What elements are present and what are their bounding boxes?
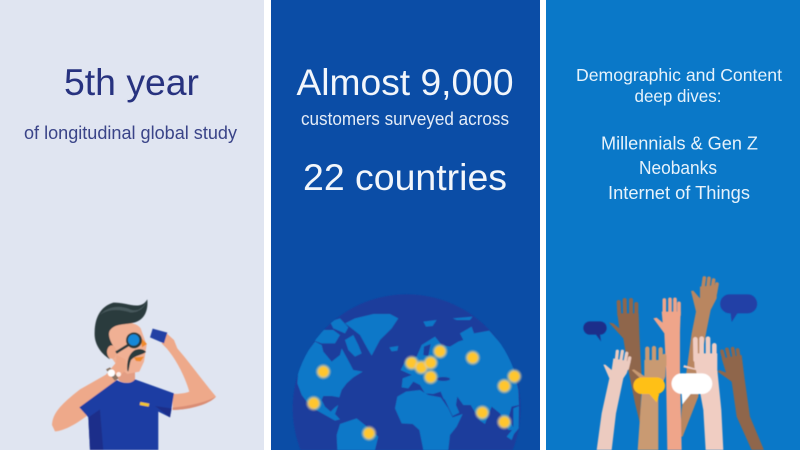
hair (95, 299, 147, 359)
markers (305, 343, 523, 442)
ear (107, 345, 116, 359)
moustache (127, 349, 146, 372)
illustration: globe with glowing markers (293, 294, 523, 450)
inland seas (423, 344, 450, 381)
hand: center salmon (653, 299, 682, 450)
southeast asia islands (507, 406, 519, 440)
text: deep dive topics: Internet of Things (608, 182, 750, 203)
speech bubble: yellow (633, 377, 665, 402)
hand: dark brown back left (609, 300, 642, 423)
hand: dark brown right (718, 349, 764, 450)
iceland (389, 346, 398, 351)
text: deep dive topics: Neobanks (639, 157, 717, 178)
t-shirt (79, 379, 174, 450)
panel: deep dives (546, 0, 800, 450)
globe disc (293, 294, 521, 450)
neck (118, 365, 135, 383)
text: deep dive topics (601, 132, 758, 203)
speech bubble: white (671, 373, 712, 404)
goggle strap and lens (116, 345, 128, 353)
text: deep dive intro: Demographic and Content (576, 65, 782, 85)
near arm (52, 355, 127, 431)
illustration: raised hands with speech bubbles (583, 278, 764, 450)
face (107, 323, 147, 374)
illustration: man with spyglass (52, 299, 216, 450)
heading: 22 countries: 22 countries (303, 157, 507, 198)
north america (297, 342, 363, 421)
speech bubble: blue large (720, 294, 757, 322)
far arm raised to spyglass (162, 333, 216, 410)
text: deep dive topics: Millennials & Gen Z (601, 132, 758, 154)
watch (106, 367, 119, 381)
text: customers surveyed across: customers surveyed across (301, 109, 509, 129)
hand: pale left (597, 351, 631, 450)
panel: survey reach (271, 0, 540, 450)
text: deep dive intro: deep dives: (634, 86, 722, 106)
greenland (345, 314, 398, 356)
south america (337, 418, 378, 450)
pocket badge (140, 402, 149, 407)
text: longitudinal global study: of longitudinal global study (24, 122, 238, 143)
arctic archipelagos (423, 320, 437, 327)
spyglass (150, 329, 167, 343)
text: deep dive intro (576, 65, 782, 106)
nose and lip (141, 337, 147, 347)
speech bubble: dark blue small (583, 321, 607, 341)
arctic islands (330, 318, 348, 333)
hand: pale right (683, 339, 723, 450)
hand: tan front (632, 348, 666, 450)
africa (395, 390, 463, 450)
continents (297, 314, 519, 450)
eurasia (401, 327, 519, 430)
heading: almost 9,000: Almost 9,000 (296, 62, 514, 103)
hand: tan back right (680, 278, 717, 437)
heading: 5th year: 5th year (64, 62, 199, 103)
panel: study length (0, 0, 264, 450)
